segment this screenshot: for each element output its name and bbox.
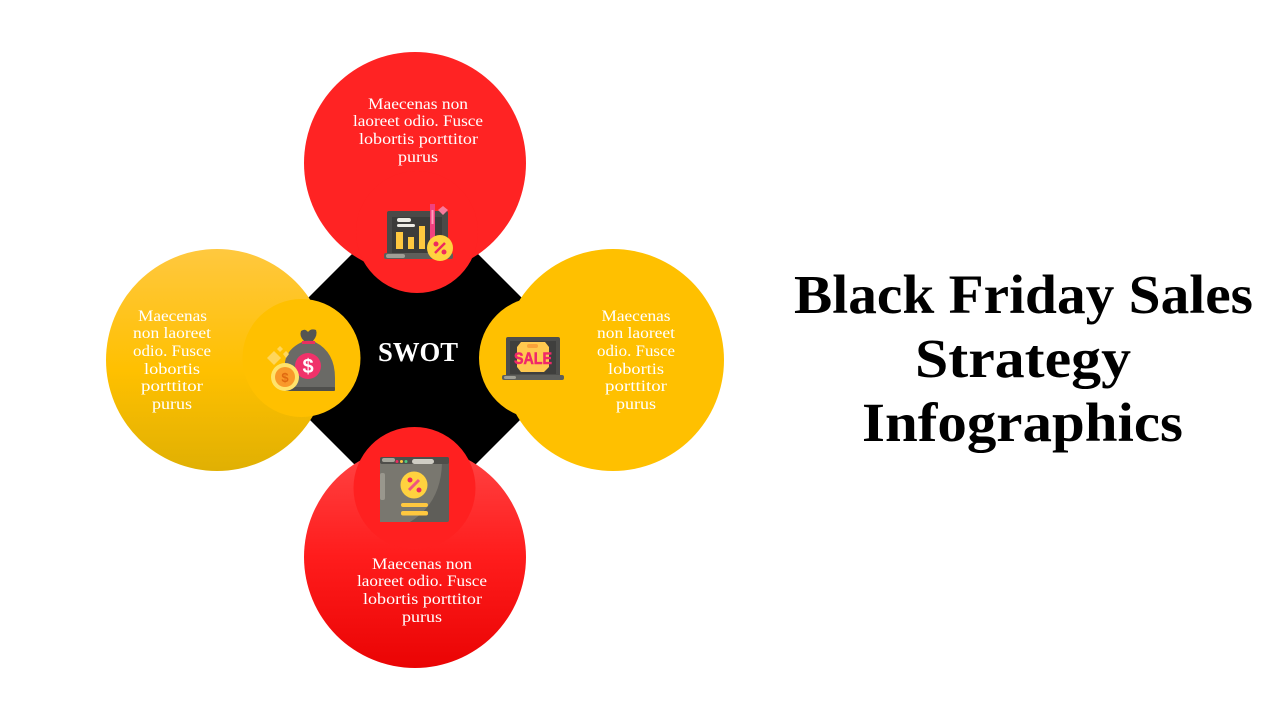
text: left bbox=[133, 308, 212, 413]
text: left: odio. Fusce bbox=[133, 343, 211, 360]
panel: right circle bbox=[479, 249, 724, 471]
panel: top circle bbox=[304, 52, 526, 293]
text: top: Maecenas non bbox=[368, 96, 468, 113]
label: SWOT: SWOT bbox=[378, 337, 458, 367]
text: right: lobortis bbox=[608, 361, 664, 378]
title bbox=[794, 264, 1253, 453]
text: right: porttitor bbox=[605, 378, 668, 395]
icon: laptop with sale tag: SALE bbox=[514, 349, 552, 368]
icon: money bag with coin: $ bbox=[281, 370, 289, 385]
text: right: purus bbox=[616, 396, 656, 413]
text: right: Maecenas bbox=[602, 308, 670, 325]
text: right: odio. Fusce bbox=[597, 343, 675, 360]
text: top: purus bbox=[398, 149, 438, 166]
panel: left circle bbox=[106, 249, 360, 471]
icon: browser window with percent badge bbox=[380, 457, 449, 522]
text: top: laoreet odio. Fusce bbox=[353, 113, 483, 130]
text: bottom: lobortis porttitor bbox=[363, 591, 483, 608]
text: bottom: laoreet odio. Fusce bbox=[357, 573, 487, 590]
text: bottom: Maecenas non bbox=[372, 556, 472, 573]
icon: laptop with chart and percent badge bbox=[384, 204, 453, 261]
text: top bbox=[353, 96, 483, 166]
text: bottom bbox=[357, 556, 487, 626]
center diamond bbox=[248, 191, 582, 525]
text: left: porttitor bbox=[141, 378, 204, 395]
title: Black Friday Sales bbox=[794, 264, 1253, 325]
text: left: purus bbox=[152, 396, 192, 413]
text: bottom: purus bbox=[402, 609, 442, 626]
title: Strategy bbox=[915, 328, 1131, 389]
text: right bbox=[597, 308, 676, 413]
text: left: non laoreet bbox=[133, 325, 212, 342]
text: right: non laoreet bbox=[597, 325, 676, 342]
title: Infographics bbox=[862, 392, 1183, 453]
text: top: lobortis porttitor bbox=[359, 131, 479, 148]
icon: money bag with coin: $ bbox=[302, 356, 314, 378]
text: left: lobortis bbox=[144, 361, 200, 378]
panel: bottom circle bbox=[304, 427, 526, 668]
icon: money bag with coin bbox=[267, 329, 335, 391]
icon: laptop with sale tag bbox=[502, 337, 564, 380]
text: left: Maecenas bbox=[138, 308, 207, 325]
